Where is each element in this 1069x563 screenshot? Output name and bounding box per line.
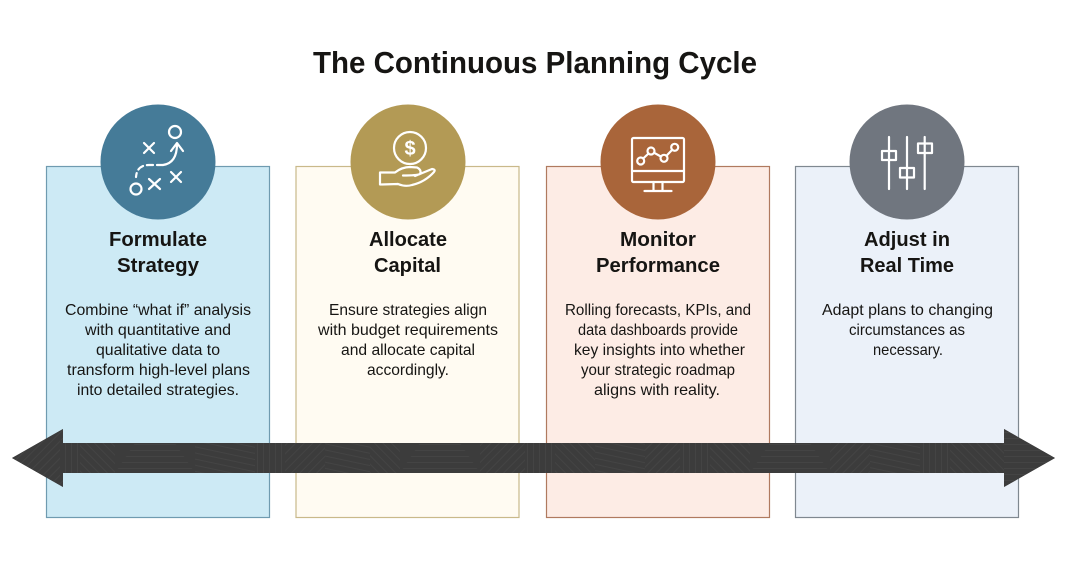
text: monitor performance description: key insights into whether [574, 342, 746, 359]
text: allocate capital description: Ensure strategies align [329, 302, 487, 319]
text: formulate strategy description: with quantitative and [84, 322, 231, 339]
text: allocate capital description: accordingly. [367, 362, 449, 379]
heading: monitor performance: Performance [596, 255, 720, 277]
panel: allocate capital [296, 166, 519, 518]
heading: adjust in real time: Real Time [860, 255, 954, 277]
heading: monitor performance [596, 229, 720, 277]
panel: formulate strategy [46, 166, 270, 518]
icon: monitor with line chart in circle [600, 104, 716, 220]
text: adjust in real time description: Adapt plans to changing [822, 302, 993, 319]
heading: formulate strategy: Formulate [109, 229, 207, 251]
text: adjust in real time description [822, 302, 993, 359]
text: allocate capital description: with budget requirements [317, 322, 498, 339]
icon: hand holding coin in circle: $ [404, 138, 416, 160]
icon: hand holding coin in circle [350, 104, 466, 220]
text: monitor performance description [565, 302, 751, 399]
heading: allocate capital: Capital [374, 255, 441, 277]
text: formulate strategy description: Combine “what if” analysis [65, 302, 251, 319]
text: allocate capital description [317, 302, 498, 379]
panel: adjust in real time [796, 166, 1018, 518]
heading: formulate strategy [109, 229, 207, 277]
text: formulate strategy description [65, 302, 251, 399]
heading: allocate capital: Allocate [369, 229, 447, 251]
icon: sliders in circle [850, 104, 964, 220]
heading: monitor performance: Monitor [620, 229, 696, 251]
panel: monitor performance [546, 166, 770, 518]
heading: adjust in real time: Adjust in [864, 229, 950, 251]
text: allocate capital description: and allocate capital [341, 342, 475, 359]
icon: strategy play diagram in circle [100, 104, 216, 220]
text: adjust in real time description: circumstances as [849, 322, 965, 339]
heading: allocate capital [369, 229, 447, 277]
text: adjust in real time description: necessary. [873, 342, 943, 359]
arrow: double-headed timeline [12, 429, 1055, 487]
text: formulate strategy description: transform high-level plans [67, 362, 250, 379]
text: formulate strategy description: into detailed strategies. [77, 382, 239, 399]
text: formulate strategy description: qualitative data to [96, 342, 220, 359]
text: monitor performance description: your strategic roadmap [581, 362, 735, 379]
text: monitor performance description: data dashboards provide [578, 322, 738, 339]
heading: adjust in real time [860, 229, 954, 277]
text: monitor performance description: Rolling forecasts, KPIs, and [565, 302, 751, 319]
text: monitor performance description: aligns with reality. [594, 382, 720, 399]
title: The Continuous Planning Cycle [313, 45, 757, 80]
heading: formulate strategy: Strategy [117, 255, 200, 277]
